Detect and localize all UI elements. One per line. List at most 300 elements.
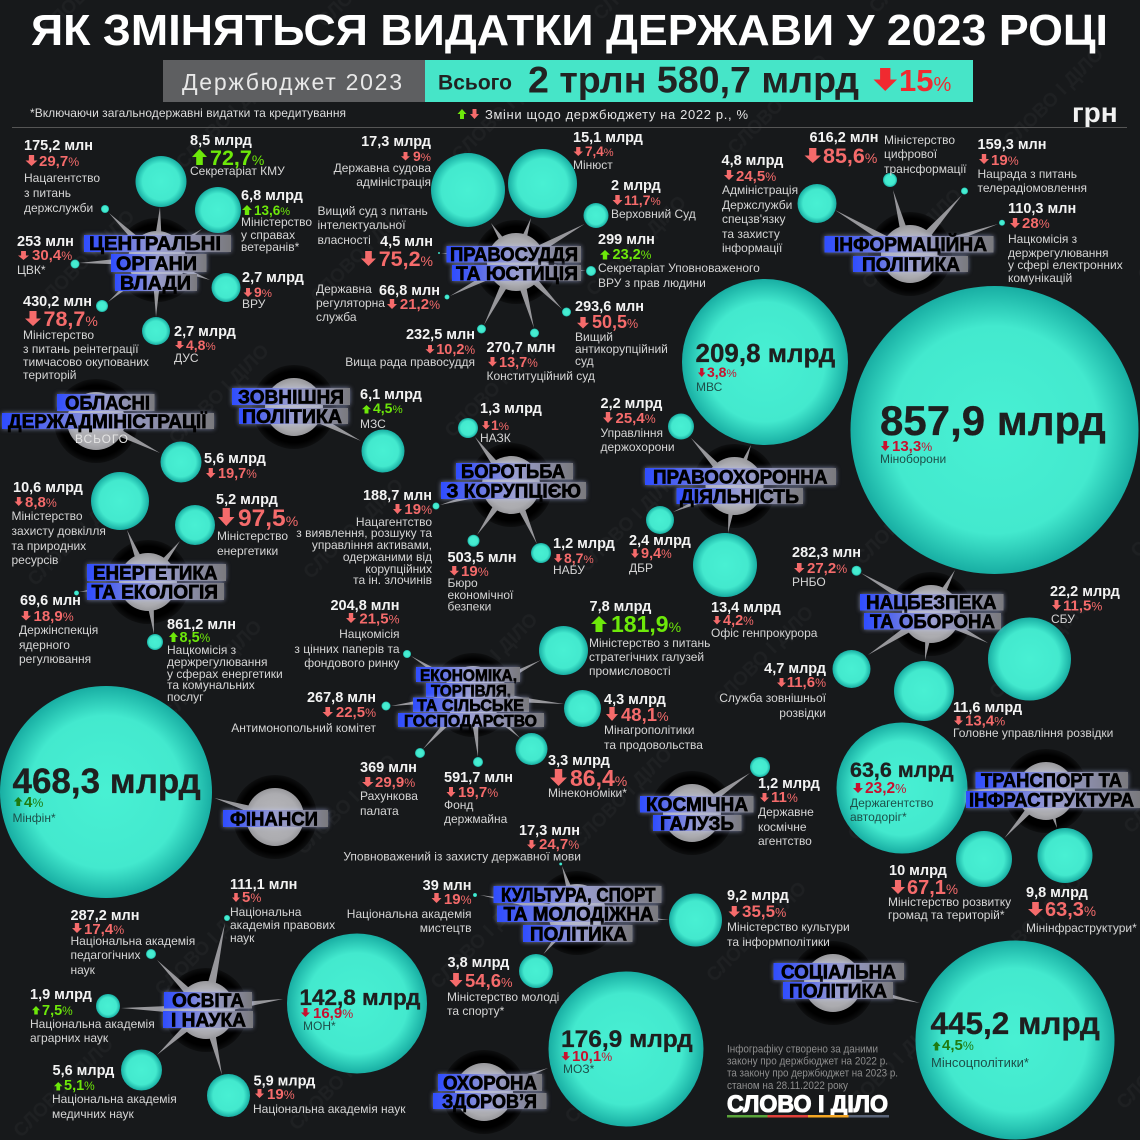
text: Мінекономіки: 86,4% (570, 765, 627, 791)
text: ГУР (953, 700, 1113, 740)
text: Мінцифри (804, 130, 967, 176)
hub (119, 553, 177, 611)
heading (966, 771, 1140, 812)
text: Рахункова палата: 29,9% (375, 774, 415, 791)
text: ДРС: 21,2% (400, 296, 440, 313)
text: ВАКС: суд (575, 354, 594, 368)
hub ring (252, 365, 336, 449)
spoke (482, 1068, 548, 1097)
bubble text: МВС: 3,8% (707, 364, 737, 380)
text: ФДМ: 19,7% (458, 784, 498, 801)
text: БЕБ: 503,5 млн (448, 550, 517, 566)
text: СБУ: СБУ (1051, 612, 1075, 626)
bubble: МВС (682, 279, 848, 445)
text: ВРУ (242, 270, 304, 311)
hub ring (889, 572, 973, 656)
text: Міненерго: енергетики (217, 544, 278, 558)
heading: ДІЯЛЬНІСТЬ (680, 487, 799, 508)
heading: ЗОВНІШНЯ (238, 388, 344, 408)
bubble text: МОЗ (561, 1026, 693, 1076)
text: Мінмолодьспорт: 54,6% (465, 970, 513, 991)
text: Держспецзв'язку: та захисту (722, 227, 780, 241)
text: Держспецзв'язку: інформації (722, 241, 783, 255)
text: Рахункова палата (360, 760, 418, 818)
text: ДУС: ДУС (174, 351, 199, 365)
panel: transport and infrastructure (836, 722, 1140, 935)
text: НАПрН: 111,1 млн (230, 877, 297, 893)
bubble text: Автодор: автодоріг* (850, 810, 907, 824)
text: СЗР (719, 661, 827, 720)
hub (455, 1063, 513, 1121)
text: Мінагрополітики: та продовольства (604, 738, 703, 752)
hub (246, 788, 304, 846)
bubble text: Автодор: 63,6 млрд (850, 758, 954, 782)
text: Мін'юст: Мінюст (573, 158, 613, 172)
text: ДБР: 2,4 млрд (629, 533, 691, 549)
text: НКРЕКП: держрегулювання (167, 655, 268, 669)
text: СЗР: 4,7 млрд (764, 661, 826, 677)
text: БЕБ: економічної (448, 588, 514, 602)
text: Мінстратегпром (589, 599, 710, 678)
text: ВРП (345, 327, 475, 369)
bubble text: МОН (300, 985, 420, 1033)
text: Мінреінтеграції: 430,2 млн (23, 294, 92, 310)
spokes (861, 570, 988, 660)
text: ВАКС (575, 299, 668, 368)
heading: ТА МОЛОДІЖНА (504, 904, 654, 926)
text: НКРЕКП: 861,2 млн (167, 617, 236, 633)
text: Нацрада: 159,3 млн (978, 137, 1047, 153)
text: Мінреінтеграції (23, 294, 149, 382)
text: СЗР: 11,6% (787, 674, 826, 691)
bubbles (431, 149, 608, 338)
spokes (79, 530, 180, 634)
text: РНБО: РНБО (792, 575, 826, 589)
heading: ВЛАДИ (120, 274, 191, 294)
text: НАМ (347, 878, 472, 935)
text: РНБО (792, 545, 861, 589)
text: Міндовкілля: ресурсів (12, 553, 58, 567)
text: НАДС: 175,2 млн (24, 138, 93, 154)
text: Міндовкілля: захисту довкілля (12, 524, 106, 538)
spokes (967, 785, 1057, 838)
text: Мінреінтеграції: тимчасово окупованих (23, 355, 149, 369)
bubble: Мінфін (0, 686, 212, 898)
text: Держатомрегулювання: 69,6 млн (20, 593, 81, 609)
heading: ТРАНСПОРТ ТА (981, 771, 1122, 792)
text: ВАКС: антикорупційний (575, 342, 668, 356)
spokes (391, 656, 564, 757)
text: Мін'юст: 15,1 млрд (573, 130, 643, 146)
hub ring (54, 379, 138, 463)
heading: СОЦІАЛЬНА (781, 962, 896, 984)
text: НАМ: 19% (444, 891, 472, 908)
text: Нацрада (978, 137, 1087, 195)
text: Мінцифри: цифрової (884, 147, 938, 161)
panel: energy and ecology (12, 472, 298, 704)
budget total panel: 15% (899, 63, 951, 98)
text: ВРП: 232,5 млн (406, 327, 475, 343)
spokes (480, 866, 669, 954)
text: Мінінфраструктури: Мінінфраструктури* (1026, 921, 1137, 935)
text: Мінстратегпром: 181,9% (611, 611, 681, 637)
text: НАПрН: 5% (242, 889, 261, 906)
bubble text: Мінфін: 4% (24, 794, 43, 811)
text: ДКА (758, 776, 820, 848)
text: НААН (30, 987, 155, 1045)
currency: грн (1072, 97, 1118, 128)
bubble (160, 442, 202, 482)
bubble text: Мінфін (12, 762, 201, 825)
bubble text: Мінфін: Мінфін* (12, 811, 56, 825)
text: ОГП: Офіс генпрокурора (711, 626, 818, 640)
text: НКРЗІ: комунікацій (1008, 271, 1072, 285)
heading: ФІНАНСИ (230, 810, 318, 830)
text: ДРС: регуляторна (316, 296, 385, 310)
heading (163, 991, 253, 1032)
heading (446, 245, 581, 285)
panel: economy, trade, agriculture (231, 598, 710, 826)
text: ДРС: Державна (316, 282, 372, 296)
bubbles (74, 472, 215, 650)
bubble text: МВС: МВС (696, 380, 723, 394)
text: НКРЗІ: 28% (1022, 215, 1050, 232)
text: Омбудсман: ВРУ з прав людини (598, 276, 706, 290)
heading: З КОРУПЦІЄЮ (446, 482, 581, 502)
spoke (94, 416, 160, 453)
spokes (441, 218, 586, 328)
text: Мінінфраструктури (1026, 885, 1137, 935)
bubbles (473, 862, 722, 988)
spokes (835, 190, 998, 259)
text: НАПН: Національна академія (70, 934, 195, 948)
text: Держспецзв'язку: спецзв'язку (722, 212, 785, 226)
text: Верховний Суд: Верховний Суд (611, 207, 696, 221)
text: ФДМ: 591,7 млн (444, 770, 513, 786)
text: Мінцифри: 85,6% (823, 144, 877, 168)
spoke (214, 798, 277, 822)
text: Міненерго: 5,2 млрд (216, 492, 278, 508)
bubble (362, 430, 404, 472)
text: НАПрН: Національна (230, 905, 302, 919)
panel: central bodies (17, 133, 312, 382)
text: Міндовкілля: 8,8% (25, 494, 57, 511)
heading (84, 234, 231, 294)
text: ДБР (629, 533, 691, 575)
bubble text: МОН: МОН* (303, 1019, 336, 1033)
heading: БОРОТЬБА (461, 462, 565, 483)
hub ring (535, 871, 619, 955)
text: АРМА: 19% (404, 501, 432, 518)
text: МЗС: 4,5% (373, 400, 403, 416)
text: Держатомрегулювання: регулювання (19, 652, 91, 666)
text: НКРЕКП: Нацкомісія з (167, 643, 237, 657)
text: Верховний Суд: 11,7% (624, 192, 661, 208)
text: МЗС: МЗС (360, 417, 386, 431)
text: ДРС: 66,8 млн (379, 283, 440, 299)
text: НКЦПФР (294, 598, 400, 670)
text: НКРЗІ: держрегулювання (1008, 246, 1109, 260)
text: Мінагрополітики: Мінагрополітики (604, 723, 694, 737)
text: НКРЗІ (1008, 201, 1123, 285)
hub (663, 784, 721, 842)
bubble text: Міноборони: 857,9 млрд (880, 397, 1106, 444)
text: ДБР: ДБР (629, 561, 653, 575)
text: СБУ: 22,2 млрд (1050, 584, 1120, 600)
text: МЗС: 6,1 млрд (360, 387, 422, 403)
bubble text: Мінсоцполітики: 445,2 млрд (930, 1005, 1100, 1041)
text: НКРЕКП (167, 617, 283, 704)
text: АРМА: 188,7 млн (363, 488, 432, 504)
heading (860, 593, 1004, 633)
bubbles (96, 915, 250, 1117)
text: Держспецзв'язку: 24,5% (736, 168, 776, 185)
text: ОГП (711, 600, 818, 640)
bubble text: Мінфін: 468,3 млрд (12, 762, 201, 801)
text: Мінагрополітики (604, 692, 703, 752)
hub (706, 457, 764, 515)
hub ring (469, 443, 553, 527)
text: Міндовкілля: та природних (12, 539, 86, 553)
bubble text: Мінсоцполітики (930, 1005, 1100, 1070)
text: НКЦПФР: 21,5% (359, 610, 400, 628)
panel: regional administrations (2, 379, 266, 482)
text: ВС ІВ: інтелектуальної (318, 218, 406, 232)
heading (645, 468, 836, 508)
budget total panel (425, 60, 973, 102)
text: ВС ІВ: Вищий суд з питань (318, 204, 428, 218)
text: НАБУ: 8,7% (564, 550, 594, 566)
text: НАМ: 39 млн (423, 878, 472, 894)
text: НАМН (52, 1063, 177, 1121)
text: НКРЕКП: 8,5% (180, 630, 211, 646)
text: АРМА: корупційних (365, 562, 432, 576)
hub (177, 981, 235, 1039)
heading: ГАЛУЗЬ (660, 814, 734, 835)
heading (441, 462, 586, 502)
text: НАМН: Національна академія (52, 1092, 177, 1106)
source note: закону про держбюджет на 2022 р. (727, 1056, 888, 1068)
bubble text: МОЗ: 10,1% (572, 1048, 612, 1065)
text: НАПрН (230, 877, 335, 945)
text: УДО: Управління (600, 426, 663, 440)
text: Мінветеранів (241, 188, 312, 254)
sublabel: ВСЬОГО (75, 432, 128, 446)
text: Мінстратегпром: стратегічних галузей (589, 650, 704, 664)
text: Мінекономіки: 3,3 млрд (548, 753, 610, 769)
bubbles (70, 156, 241, 345)
text: Мінстратегпром: промисловості (589, 664, 671, 678)
spokes (79, 207, 210, 317)
text: НАПрН: академія правових (230, 918, 335, 932)
panel: foreign policy (232, 365, 422, 472)
spoke (292, 402, 361, 441)
text: Мінмолодьспорт: 3,8 млрд (448, 955, 509, 971)
hub ring (115, 218, 199, 302)
text: мовний омбудсмен: 24,7% (539, 836, 579, 853)
bubble text: Автодор: 23,2% (865, 780, 906, 797)
budget label panel: Держбюджет 2023 (182, 69, 402, 95)
hub (444, 666, 502, 724)
text: НКРЗІ: у сфері електронних (1008, 258, 1123, 272)
heading: ОРГАНИ (116, 254, 197, 275)
heading: ЦЕНТРАЛЬНІ (89, 234, 221, 255)
text: Мінстратегпром: 7,8 млрд (590, 599, 651, 615)
text: Мінрозвитку (888, 863, 1011, 922)
text: Мін'юст (573, 130, 643, 172)
text: АРМА: Нацагентство (356, 515, 432, 529)
text: ВС ІВ: 75,2% (379, 247, 433, 271)
text: Мінінфраструктури: 9,8 млрд (1026, 885, 1088, 901)
text: Омбудсман (598, 232, 760, 290)
text: Держатомрегулювання: ядерного (19, 638, 70, 652)
heading: ДЕРЖАДМІНІСТРАЦІЇ (8, 412, 207, 433)
text: МКІП: 9,2 млрд (727, 888, 789, 904)
heading: КОСМІЧНА (646, 795, 748, 816)
text: Мін'юст: 7,4% (585, 144, 614, 159)
bubble text: Міноборони: Міноборони (880, 452, 946, 466)
text: БЕБ: 19% (461, 563, 489, 580)
text: ДСА: 9% (413, 148, 431, 164)
text: НАБУ: НАБУ (553, 563, 585, 577)
bubble: МОЗ (548, 972, 704, 1126)
text: НКРЗІ: Нацкомісія з (1008, 232, 1078, 246)
text: КСУ: Конституційний суд (486, 369, 595, 383)
text: УДО: 2,2 млрд (600, 396, 662, 412)
heading: ЕНЕРГЕТИКА (93, 564, 218, 584)
logo: СЛОВО І ДІЛО (727, 1091, 888, 1118)
spokes (673, 438, 751, 533)
text: Мінветеранів: у справах (241, 228, 295, 242)
spokes (440, 437, 537, 544)
heading (640, 795, 754, 835)
text: ВС ІВ: 4,5 млн (380, 234, 433, 250)
text: УДО: 25,4% (616, 410, 656, 427)
bubble text: Автодор: Держагентство (850, 796, 934, 810)
hub ring (106, 540, 190, 624)
text: Мінреінтеграції: 78,7% (44, 307, 98, 331)
heading (774, 962, 904, 1002)
text: ГУР: 13,4% (965, 712, 1005, 730)
spokes (121, 923, 283, 1075)
text: ЦВК: 253 млн (17, 234, 74, 250)
text: АРМА: одержаними від (343, 550, 432, 564)
bubble text: МОН: 16,9% (313, 1005, 353, 1022)
text: КМУ: Секретаріат КМУ (190, 164, 285, 178)
heading (398, 667, 544, 730)
text: Мінветеранів: 13,6% (254, 203, 290, 218)
text: ДКА: 11% (771, 789, 798, 806)
text: ДУС: 2,7 млрд (174, 324, 236, 340)
text: Міненерго (216, 492, 298, 558)
heading (824, 234, 994, 276)
text: АМКУ (231, 690, 376, 735)
text: НАДС: 29,7% (39, 153, 79, 170)
text: КСУ: 13,7% (499, 355, 538, 371)
text: Рахункова палата: Рахункова (360, 789, 418, 803)
hub ring (650, 771, 734, 855)
heading (87, 564, 226, 604)
text: БЕБ: Бюро (448, 576, 478, 590)
text: Рахункова палата: 369 млн (360, 760, 417, 776)
text: ВРУ: 2,7 млрд (242, 270, 304, 286)
hub ring (791, 941, 875, 1025)
budget total panel: 2 трлн 580,7 млрд (528, 60, 859, 100)
text: НАПН: педагогічних (70, 948, 140, 962)
text: ВАКС: 50,5% (592, 312, 638, 332)
legend: changes: Зміни щодо держбюджету на 2022 р., % (485, 107, 748, 122)
heading: ЕКОНОМІКА, (420, 667, 517, 685)
text: КМУ (190, 133, 285, 178)
source note: та закону про держбюджет на 2023 р. (727, 1068, 898, 1080)
text: Мінрозвитку: 10 млрд (889, 863, 947, 879)
text: КСУ: 270,7 млн (486, 340, 556, 356)
bubble: МОН (287, 934, 427, 1074)
panel: education and science (30, 877, 427, 1121)
bubbles (956, 828, 1092, 887)
text: НКЦПФР: Нацкомісія (339, 627, 400, 641)
text: Мінреінтеграції: Міністерство (23, 328, 94, 342)
text: НКЦПФР: фондового ринку (304, 656, 400, 670)
text: Міндовкілля: Міністерство (12, 509, 83, 523)
text: ВАКС: Вищий (575, 330, 613, 344)
text: ДКА: Державне (758, 805, 814, 819)
text: БЕБ (448, 550, 517, 614)
text: ДРС (316, 282, 440, 324)
text: АМКУ: Антимонопольний комітет (231, 721, 376, 735)
heading: ОСВІТА (172, 991, 244, 1012)
text: УДО: держохорони (600, 440, 675, 454)
bubble (750, 757, 770, 777)
text: Держспецзв'язку: Адміністрація (722, 183, 798, 197)
text: Нацрада: Нацрада з питань (978, 167, 1077, 181)
text: НАН: 5,9 млрд (254, 1074, 315, 1090)
text: ВРУ: 9% (254, 284, 272, 300)
text: МКІП: та інформполітики (727, 935, 830, 949)
bubble text: Мінсоцполітики: Мінсоцполітики* (931, 1055, 1029, 1070)
panel: national security and defence (719, 286, 1138, 740)
hub (482, 456, 540, 514)
hub ring (1004, 749, 1088, 833)
panel: anti-corruption (296, 401, 615, 614)
text: ВРП: Вища рада правосуддя (345, 355, 475, 369)
text: Держатомрегулювання: Держінспекція (19, 623, 98, 637)
bubble text: Мінсоцполітики: 4,5% (942, 1037, 974, 1054)
text: Міндовкілля: 10,6 млрд (13, 480, 83, 496)
text: НАБУ: 1,2 млрд (553, 536, 615, 552)
text: Мінрозвитку: 67,1% (907, 877, 958, 899)
text: НАЗК: 1,3 млрд (480, 401, 542, 417)
text: НКРЕКП: послуг (167, 690, 204, 704)
text: мовний омбудсмен: 17,3 млн (519, 823, 580, 839)
text: Рахункова палата: палата (360, 804, 399, 818)
heading (232, 388, 350, 428)
footnote: *Включаючи загальнодержавні видатки та кредитування (30, 106, 346, 120)
text: Мінмолодьспорт: та спорту* (447, 1004, 505, 1018)
source note: Інфографіку створено за даними (727, 1044, 878, 1056)
hub (265, 378, 323, 436)
hub (902, 585, 960, 643)
text: Мінцифри: трансформації (884, 162, 967, 176)
text: ЦВК: ЦВК* (17, 263, 46, 277)
text: НКРЕКП: у сферах енергетики (167, 667, 283, 681)
hub (804, 954, 862, 1012)
text: НАДС (24, 138, 100, 215)
heading: ПОЛІТИКА (862, 255, 960, 276)
bubble text: Міноборони (880, 397, 1106, 466)
text: Міненерго: Міністерство (217, 529, 288, 543)
heading: ІНФОРМАЦІЙНА (834, 234, 987, 256)
